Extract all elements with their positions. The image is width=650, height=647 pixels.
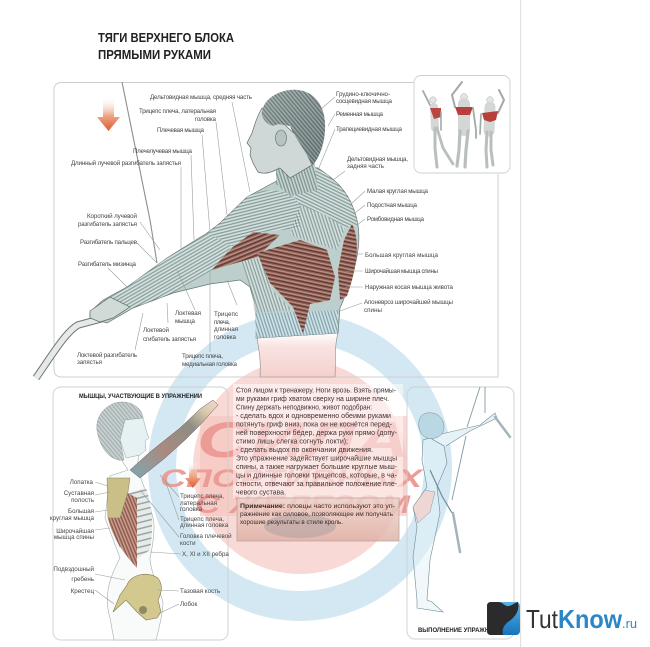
text block: exercise description: ней поверхности бёдер, держа руки прямо (допу- xyxy=(236,429,397,437)
panel: main anatomy frame xyxy=(54,82,498,377)
panel heading: МЫШЦЫ, УЧАСТВУЮЩИЕ В УПРАЖНЕНИИ xyxy=(79,393,202,400)
labels: left side of main figure: Короткий лучевой xyxy=(87,213,138,220)
labels right: X, XI и XII ребра xyxy=(182,551,229,558)
labels right: длинная головка xyxy=(180,522,229,529)
watermark: circular emblem: СИЛА xyxy=(197,412,409,468)
muscle: trapezius xyxy=(282,168,358,228)
labels left: полость xyxy=(71,497,94,504)
logo: TutKnow xyxy=(487,602,637,635)
figure 3 back view xyxy=(480,90,504,167)
labels right: Тазовая кость xyxy=(180,588,220,595)
leader lines xyxy=(95,475,181,614)
labels: left side of main figure: Трицепс xyxy=(214,311,238,318)
text block: exercise description: стности, отвечают за правильное положение пле- xyxy=(236,481,397,488)
torso and arm xyxy=(90,165,359,338)
leader lines: main figure xyxy=(108,97,365,352)
woman body outline xyxy=(105,445,163,640)
logo: TutKnow: .ru xyxy=(622,616,637,631)
labels: left side of main figure: медиальная головка xyxy=(182,361,238,368)
labels: left side of main figure: Плечевая мышца xyxy=(157,127,205,134)
labels left: круглая мышца xyxy=(50,515,95,522)
labels left: Лопатка xyxy=(70,479,94,486)
labels: right side of main figure: спины xyxy=(364,307,383,314)
text block: exercise description: - сделать вдох и одновременно обеими руками xyxy=(236,412,391,420)
callout: note box: Примечание: пловцы часто используют это уп- xyxy=(240,503,395,510)
labels: right side of main figure: Широчайшая мышца спины xyxy=(365,268,439,275)
hair xyxy=(262,90,325,166)
raised arm xyxy=(130,400,218,478)
face xyxy=(120,418,149,458)
text block: exercise description: чевого сустава. xyxy=(236,490,286,496)
labels: right side of main figure: Большая круглая мышца xyxy=(365,252,439,259)
page right margin rule xyxy=(520,0,521,647)
logo wordmark: Tut xyxy=(526,604,559,634)
labels: left side of main figure: разгибатель запястья xyxy=(78,221,137,228)
text block: exercise description: - сделать выдох по окончании движения. xyxy=(236,447,373,454)
labels: left side of main figure xyxy=(71,94,252,368)
labels right: головка xyxy=(180,506,203,513)
labels: left side of main figure: Длинный лучевой разгибатель запястья xyxy=(71,160,181,167)
muscle: lower back xyxy=(255,310,338,338)
labels: right side of main figure: Подостная мышца xyxy=(367,202,418,209)
pants xyxy=(257,333,338,377)
title: ТЯГИ ВЕРХНЕГО БЛОКА xyxy=(98,31,234,45)
labels: left side of main figure: Плечелучевая мышца xyxy=(133,148,193,155)
woman outline xyxy=(413,438,447,612)
labels: right side of main figure: Трапециевидная мышца xyxy=(336,126,403,133)
icon: red down arrow xyxy=(97,97,120,131)
text block: exercise description: цы и длинные головки трицепсов, которые, в ча- xyxy=(236,472,397,480)
labels: left side of main figure: плеча, xyxy=(214,319,230,326)
labels right xyxy=(180,493,232,608)
panel: small three-figure muscle chart xyxy=(414,76,510,173)
labels: right side of main figure xyxy=(336,91,454,314)
muscle: shoulder xyxy=(207,190,300,246)
labels left: Широчайшая xyxy=(56,528,94,535)
labels left: мышца спины xyxy=(54,534,95,541)
labels left: Суставная xyxy=(64,490,94,497)
labels left xyxy=(50,479,95,595)
labels: left side of main figure: Разгибатель пальцев xyxy=(80,239,138,246)
labels: right side of main figure: Малая круглая мышца xyxy=(367,188,429,195)
face xyxy=(247,108,312,178)
text block: exercise description: Стоя лицом к тренажеру. Ноги врозь. Взять прямы- xyxy=(236,388,396,394)
caption: ВЫПОЛНЕНИЕ УПРАЖНЕНИЯ xyxy=(418,628,506,634)
figure 2 front view xyxy=(452,82,476,167)
labels left: Подвздошный xyxy=(53,566,95,573)
muscle: red teres band xyxy=(212,232,280,270)
bar handle xyxy=(36,318,104,378)
labels: right side of main figure: Апоневроз широчайшей мышцы xyxy=(364,299,454,306)
logo icon xyxy=(487,602,520,635)
labels: right side of main figure: Ромбовидная мышца xyxy=(367,216,425,223)
labels: right side of main figure: сосцевидная мышца xyxy=(336,98,393,105)
hair xyxy=(419,413,444,439)
labels right: латеральная xyxy=(180,500,217,507)
labels: left side of main figure: мышца xyxy=(175,318,196,325)
labels: left side of main figure: Локтевая xyxy=(175,310,201,317)
text block: exercise description: ми руками гриф хватом сверху на ширине плеч. xyxy=(236,396,389,403)
panel: muscles involved xyxy=(50,387,232,640)
illustration: man performing pulldown xyxy=(36,90,359,378)
figure 1 side view xyxy=(423,91,453,167)
labels left: Большая xyxy=(68,508,94,515)
logo: TutKnow: Know xyxy=(558,604,623,634)
title xyxy=(98,31,234,62)
labels: left side of main figure: головка xyxy=(195,116,217,123)
cable machine line xyxy=(122,82,157,263)
labels: right side of main figure: Ременная мышца xyxy=(336,111,384,118)
labels: left side of main figure: Трицепс плеча, латеральная xyxy=(139,108,216,115)
text block: exercise description: потянуть гриф вниз, пока он не коснётся перед- xyxy=(236,422,392,428)
ribs xyxy=(118,488,152,562)
scapula xyxy=(107,478,130,518)
muscle: forearm xyxy=(103,233,232,316)
labels: left side of main figure: Разгибатель мизинца xyxy=(78,261,137,268)
muscle: red side strip xyxy=(338,224,357,300)
labels right: Головка плечевой xyxy=(180,533,232,540)
labels: left side of main figure: длинная xyxy=(214,326,238,333)
title: ПРЯМЫМИ РУКАМИ xyxy=(98,48,211,62)
ear xyxy=(276,130,286,146)
labels: left side of main figure: Локтевой разгибатель xyxy=(77,352,137,359)
labels right: Трицепс плеча, xyxy=(180,493,224,500)
labels: left side of main figure: Дельтовидная мышца, средняя часть xyxy=(150,94,252,101)
pants xyxy=(413,490,435,523)
bars xyxy=(453,417,510,552)
text block: exercise description: стимо лишь слегка согнуть локти); xyxy=(236,438,348,446)
latissimus dorsi xyxy=(108,490,137,568)
labels right: Трицепс плеча, xyxy=(180,516,224,523)
labels: left side of main figure: Трицепс плеча, xyxy=(182,353,223,360)
labels: right side of main figure: Грудино-ключично- xyxy=(336,91,390,98)
text block: exercise description: Спину держать неподвижно, живот подобран: xyxy=(236,404,372,412)
labels: left side of main figure: головка xyxy=(214,334,237,341)
wrist wrap xyxy=(90,297,130,322)
labels: right side of main figure: Дельтовидная мышца, xyxy=(347,156,408,163)
text block: exercise description: спины, а также нагружает большие круглые мыш- xyxy=(236,463,397,471)
labels left: Крестец xyxy=(71,588,94,595)
ponytail hair xyxy=(97,402,143,460)
watermark: circular emblem: С ЖЕЛЕЗОМ xyxy=(195,491,412,519)
labels: left side of main figure: запястья xyxy=(77,359,102,366)
muscle: red latissimus xyxy=(257,240,335,334)
cables xyxy=(452,387,485,500)
raised arm xyxy=(428,413,497,446)
lowered arm xyxy=(430,470,452,513)
callout: note box: ражнение как силовое, позволяющее им получать xyxy=(240,511,393,518)
muscle: side torso xyxy=(240,258,292,313)
red arrow xyxy=(185,462,201,488)
labels right: Лобок xyxy=(180,601,197,608)
text block: exercise description xyxy=(233,384,403,498)
labels: right side of main figure: Наружная косая мышца живота xyxy=(365,284,454,291)
callout: note box: хорошие результаты в стиле кроль. xyxy=(240,519,343,526)
labels: right side of main figure: задняя часть xyxy=(347,163,384,170)
neck xyxy=(276,160,318,196)
watermark: circular emblem: СПОРТИВНЫХ xyxy=(160,465,424,493)
labels: left side of main figure: сгибатель запястья xyxy=(143,336,196,343)
pelvis xyxy=(113,574,161,620)
labels left: гребень xyxy=(71,576,94,583)
panel: exercise execution xyxy=(407,387,514,639)
callout: note box xyxy=(237,498,399,541)
text block: exercise description: Это упражнение задействует широчайшие мышцы xyxy=(236,454,397,462)
muscle: mid back xyxy=(290,205,345,250)
labels: left side of main figure: Локтевой xyxy=(143,327,170,334)
labels right: кости xyxy=(180,540,196,547)
watermark: circular emblem xyxy=(148,313,452,621)
